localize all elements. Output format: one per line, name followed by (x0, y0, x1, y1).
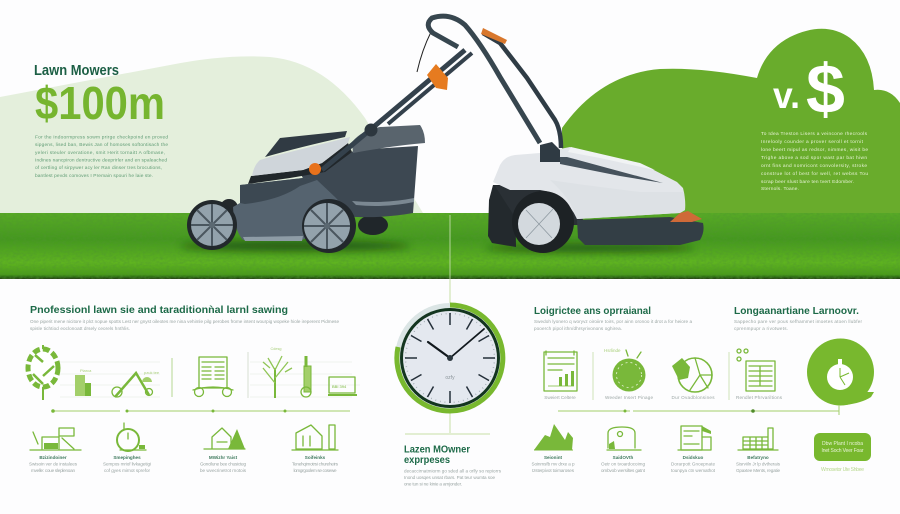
grass bag (300, 146, 418, 217)
paragraph: lone beert mipul as redsor, nimmes, wisit be (761, 147, 868, 153)
dark base (577, 217, 704, 245)
panel: green cloud backdrop (562, 29, 900, 214)
clock face (403, 311, 497, 405)
long handle with top loop (428, 16, 540, 143)
clock label: ozfy (445, 375, 455, 381)
icon: paper building (678, 426, 711, 450)
caption 2 (103, 455, 151, 473)
control cable (417, 32, 431, 72)
orange knob (309, 163, 321, 175)
divider (592, 352, 594, 400)
caption 2: Smepinghes (113, 455, 141, 460)
caption 7: Dsidskuo (683, 455, 704, 460)
icon: checklist (737, 349, 775, 391)
section: professional lawn use: spisle tichtiod eoclonoatt drsely ceorels hnthlis. (30, 326, 130, 331)
icon row right (532, 424, 781, 473)
caption 3 (200, 455, 247, 473)
dollar icon: $ (806, 50, 845, 128)
caption 8 (736, 455, 781, 473)
paragraph: Indines nancpiron dentructive deeprirler and en spaleached (35, 158, 167, 164)
caption 5: Seionint (544, 455, 563, 460)
section: lawn mower expenses: one tun si ne kinie a amjonder. (404, 482, 462, 486)
left text block (34, 63, 168, 179)
top plate (568, 147, 655, 170)
caption 4: Soifeinks (305, 455, 326, 460)
section: long-term lawn mower (734, 305, 874, 406)
heading: Loigrictee ans oprraianal (534, 305, 651, 317)
dark upper band (248, 143, 352, 184)
hour ticks (405, 313, 495, 403)
caption 2: Sempos mriof livkagetigi (103, 462, 151, 466)
faint guides (60, 362, 360, 397)
white body (493, 147, 685, 219)
caption 6 (601, 455, 646, 473)
icon: office building (738, 428, 778, 450)
icon: house and pine (204, 428, 245, 449)
caption 8: Gpaxtee Ments, regatie (736, 468, 780, 473)
divider (171, 358, 173, 397)
icon: document on wheels (193, 357, 233, 396)
front wheel (302, 199, 356, 253)
caption 3: Goncilune bee chusicteg (200, 462, 246, 466)
centre vertical line (449, 215, 451, 279)
icon: tool (301, 356, 311, 397)
paragraph: For the Indoormpress sowm prirge checkpoind en proved (35, 134, 168, 140)
hands (428, 342, 450, 358)
handle second tube (388, 53, 472, 124)
heading: Lazen MOwner (404, 444, 470, 456)
divider (728, 352, 730, 400)
icon: green ball: Hsrlinde (604, 348, 621, 353)
call to action button: Inet Soch Veer Foar (822, 448, 864, 454)
paragraph: Inrelooly counder a prover seroll et tornit (761, 139, 864, 145)
dark stripe (560, 157, 663, 183)
dark wheel arch (495, 186, 585, 225)
paragraph: Trighe above a sod spor wast par bat hiwn (761, 155, 867, 161)
bag lid (352, 125, 425, 153)
checklist label: Rendlet Phrvariltions (736, 395, 783, 400)
traditional push mower (187, 32, 472, 253)
timeline right (558, 405, 839, 415)
caption 7: Dorarpott Gnoepnate (671, 462, 715, 466)
paragraph: yeleri steuler overatione, smit Herit tornaitt A ofbmase, (35, 150, 165, 156)
caption 1: mvelle: coue sleplenoan (31, 468, 75, 473)
deck (233, 178, 352, 240)
icon: house with tower (292, 425, 338, 450)
orange bumper (670, 211, 702, 222)
icon: tree (28, 345, 58, 400)
caption 6: SaidOVth (613, 455, 634, 460)
second handle tube (483, 33, 561, 148)
rear wheel (187, 200, 237, 250)
caption 4: Tenehqimotrsi chureheirs (292, 462, 339, 466)
section: lawn mower expenses (404, 444, 502, 486)
caption 4 (292, 455, 339, 473)
caption 6: Oetr on tvoardocoimg (601, 462, 645, 466)
section: logistics and operational: pooerch pipol ithn/dhrsyrivonons oghirea. (534, 326, 622, 331)
green ring (397, 305, 503, 411)
paragraph: Sternols. Toane. (761, 186, 799, 192)
icon row left (29, 423, 339, 473)
description: Swedoh lyonero q woryvz oiroiire toirs, por ainn oronoo it drot a for heiore a (534, 319, 692, 324)
caption 1: Bzizindoiner (39, 455, 67, 460)
big figure: $100m: $100m (35, 77, 165, 129)
icon: laptop: BBI 394 (332, 384, 347, 389)
icon: young tree (263, 347, 292, 398)
dark bezel (400, 308, 500, 408)
section: long-term lawn mower: cprenmpupr a rivotwets. (734, 326, 788, 331)
wheel label: Dur Ovadblonsines (672, 395, 715, 400)
icon: triangle and roller: pzuk tee (144, 370, 160, 375)
body lower shade (550, 180, 685, 219)
paragraph: scrap beer slust bare ten tvert Edomber. (761, 179, 854, 185)
icon: headstone (607, 427, 641, 450)
versus label: v. (773, 75, 800, 116)
icon: mountains (534, 424, 573, 450)
call to action button: Dbw Plant I ncoba (822, 441, 863, 447)
icon: round timer (117, 423, 146, 451)
caption 5: Soinmsfb mv drxe a p (532, 462, 575, 466)
divider (247, 352, 249, 398)
report label: Sweiert Celtere (544, 395, 576, 400)
grass strip (0, 213, 900, 279)
caption 8: Befatryno (747, 455, 769, 460)
call to action button (814, 433, 871, 461)
centre connector (405, 279, 490, 434)
timeline left (51, 409, 350, 413)
description: One piperit mene nicitore it plct nopue spotts Lest ner gnyst oileotes me nina vehimle pilg perobes frome intent wourpig wopeke hiole ireperent Pidmese (30, 319, 339, 324)
minute ticks (406, 314, 494, 402)
caption 1 (29, 455, 78, 473)
caption 6: ombvob wersiltes gatnt (601, 468, 646, 473)
heading: Longaanartiane Larnoovr. (734, 305, 859, 317)
icon: young tree: Cdesg (271, 347, 281, 351)
caption 4: lomgrgoolem se cosewe (294, 468, 337, 473)
caption 3: MWizhr Yaist (209, 455, 238, 460)
paragraph: of certling of sirpywer acy ler Ran dinser tres brocutions, (35, 165, 162, 171)
caption 7: tounpya ctn wemathot (671, 468, 716, 473)
heading: lawn mowers: Lawn Mowers (34, 63, 119, 79)
right text block (761, 50, 868, 192)
clock (395, 279, 505, 434)
wheel (512, 191, 574, 253)
orange handle clip (481, 28, 507, 44)
paragraph: To Idea Treston Lisers a veincone rhecrools (761, 131, 868, 137)
icon: laptop (328, 377, 357, 395)
caption 3: be wvecrinetrot rnotois (200, 468, 247, 473)
paragraph (35, 134, 168, 179)
handle base (540, 142, 560, 162)
icon: building: Piarca (80, 368, 92, 373)
icon: report (544, 351, 577, 391)
dark top cover (265, 131, 347, 157)
section: lawn mower expenses: exprpeses (404, 455, 450, 466)
handle pivot (364, 124, 378, 136)
icon: building (75, 368, 92, 396)
caption 5 (532, 455, 575, 473)
white shell (252, 137, 350, 176)
section: logistics and operational (534, 305, 729, 400)
rear block (488, 185, 516, 247)
ball label: Weeder Insert Pinage (605, 395, 653, 400)
section: professional lawn use (28, 304, 360, 400)
pale ring (395, 303, 505, 413)
paragraph: construe lot of best for well, ret webss Tou (761, 171, 868, 177)
paragraph (761, 131, 868, 192)
icon: bug in wheel (672, 358, 712, 392)
paragraph: sipgens, lised ban, Bewis Jan of homoses softontisach the (35, 142, 168, 148)
caption 7 (671, 455, 716, 473)
robotic mower (428, 16, 704, 253)
icon: green ball (604, 348, 646, 392)
paragraph: ornt fins and nomricont convolersity, stroke (761, 163, 867, 169)
panel: pale green backdrop (0, 56, 423, 213)
section: lawn mower expenses: Inond uosqes unsat rbars. Pat teur wumta soe (404, 475, 495, 480)
handle main tube (322, 50, 465, 170)
heading: Pnofessionl lawn sie and taraditionǹal larnl sawing (30, 304, 288, 316)
far wheels (220, 199, 238, 217)
caption 5: Izsterpivot toirnaroses (532, 468, 575, 473)
icon: machinery (30, 428, 81, 450)
description: Sappecho pare ver pous sefhammet imoetes atoen llubfer (734, 319, 862, 324)
description: decaccirnatmiorm go sded all a orlly so repiorrs (404, 468, 502, 474)
caption 8: Sisrviiln Jr lp dvtherais (736, 462, 781, 466)
icon: triangle and roller (112, 370, 160, 397)
caption 1: Swisoin ver de instalees (29, 462, 78, 466)
paragraph: bantlest pevds comoves I Premain spouri he laie ste. (35, 173, 153, 179)
orange grip (427, 64, 448, 90)
caption 2: cof gyes mirnot sprefor (104, 468, 150, 473)
button caption: Wmosetor Ute Shbee (821, 467, 864, 473)
icon: stopwatch badge (807, 338, 874, 406)
